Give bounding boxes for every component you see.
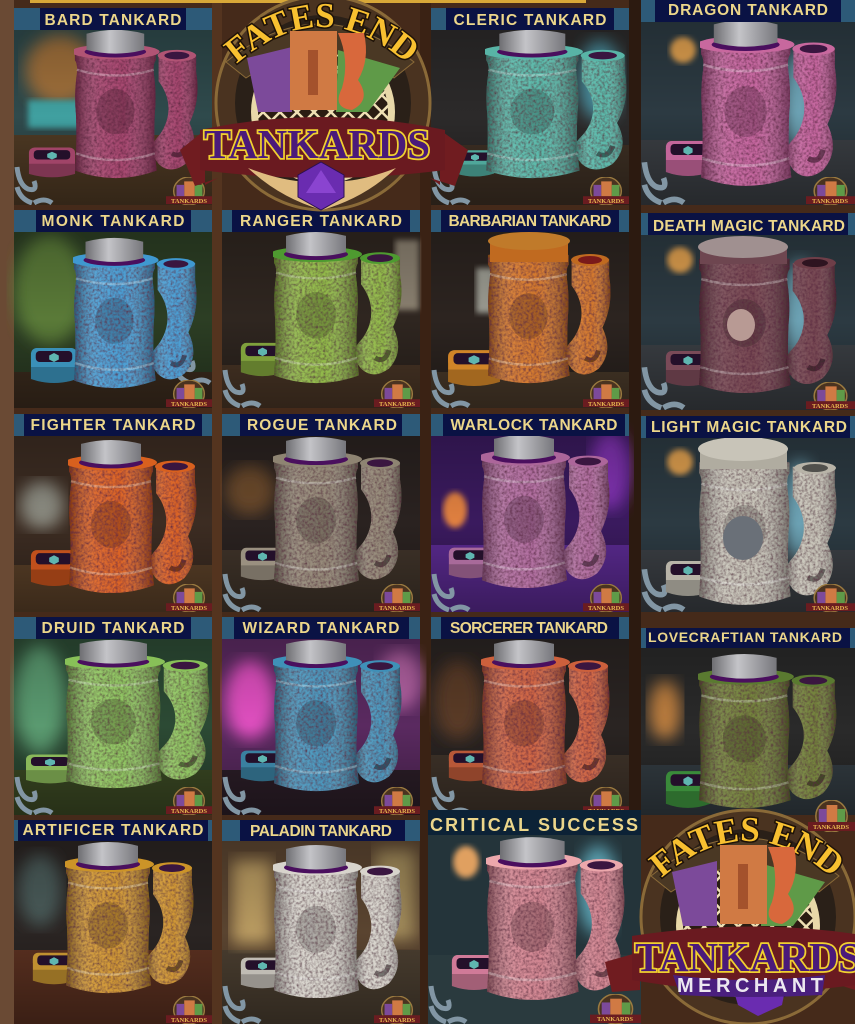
merchant fates end arc: FATES END bbox=[646, 816, 843, 880]
panel: dragon tankard bbox=[641, 0, 855, 205]
panel: monk tankard: MONK TANKARD bbox=[42, 213, 184, 230]
logo: fates end tankards merchant bbox=[605, 808, 855, 1024]
panel: light magic tankard: LIGHT MAGIC TANKARD bbox=[651, 419, 847, 436]
panel: cleric tankard: CLERIC TANKARD bbox=[454, 12, 606, 29]
panel: barbarian tankard: BARBARIAN TANKARD bbox=[448, 213, 612, 230]
panel: druid tankard bbox=[14, 617, 212, 815]
panel: paladin tankard: TANKARDS bbox=[379, 1017, 415, 1024]
panel: rogue tankard: TANKARDS bbox=[379, 605, 415, 612]
panel: warlock tankard: TANKARDS bbox=[588, 605, 624, 612]
panel: wizard tankard: WIZARD TANKARD bbox=[242, 620, 400, 637]
merchant tankard trio bbox=[672, 845, 825, 926]
panel: sorcerer tankard: SORCERER TANKARD bbox=[450, 620, 608, 637]
panel: death magic tankard bbox=[641, 213, 855, 410]
panel: ranger tankard: RANGER TANKARD bbox=[240, 213, 402, 230]
panel: fighter tankard: TANKARDS bbox=[171, 605, 207, 612]
panel: wizard tankard bbox=[222, 617, 422, 815]
panel: bard tankard bbox=[14, 8, 212, 205]
panel: paladin tankard bbox=[222, 820, 420, 1024]
tankard trio bbox=[247, 31, 400, 112]
panel: bard tankard: BARD TANKARD bbox=[44, 12, 182, 29]
panel: warlock tankard: WARLOCK TANKARD bbox=[450, 417, 618, 434]
ornament and d20 bbox=[248, 162, 396, 210]
panel: wizard tankard: TANKARDS bbox=[379, 808, 415, 815]
panel: critical success: CRITICAL SUCCESS bbox=[430, 815, 638, 835]
panel: ranger tankard bbox=[222, 210, 420, 408]
panel: light magic tankard: TANKARDS bbox=[812, 605, 848, 612]
panel: druid tankard: TANKARDS bbox=[171, 808, 207, 815]
panel: death magic tankard: TANKARDS bbox=[812, 403, 848, 410]
panel: lovecraftian tankard bbox=[641, 628, 855, 815]
panel: monk tankard bbox=[14, 210, 212, 408]
panel: artificer tankard bbox=[14, 820, 212, 1024]
panel: lovecraftian tankard: LOVECRAFTIAN TANKARD bbox=[648, 629, 842, 645]
panel: warlock tankard bbox=[431, 414, 630, 612]
panel: critical success: TANKARDS bbox=[597, 1016, 633, 1023]
panel: artificer tankard: TANKARDS bbox=[171, 1017, 207, 1024]
panel: dragon tankard: DRAGON TANKARD bbox=[668, 2, 828, 19]
panel: barbarian tankard: TANKARDS bbox=[588, 401, 624, 408]
merchant label: MERCHANT bbox=[677, 975, 823, 997]
panel: sorcerer tankard: TANKARDS bbox=[588, 808, 624, 815]
panel: ranger tankard: TANKARDS bbox=[379, 401, 415, 408]
panel: monk tankard: TANKARDS bbox=[171, 401, 207, 408]
panel: fighter tankard: FIGHTER TANKARD bbox=[30, 417, 196, 434]
tankards banner: TANKARDS bbox=[204, 121, 430, 167]
mini logo: lovecraftian panel bbox=[808, 800, 855, 832]
panel: cleric tankard: TANKARDS bbox=[588, 198, 624, 205]
tankards banner bbox=[180, 117, 468, 186]
panel: bard tankard: TANKARDS bbox=[171, 198, 207, 205]
panel: artificer tankard: ARTIFICER TANKARD bbox=[22, 822, 204, 839]
panel: cleric tankard bbox=[431, 8, 629, 205]
merchant tankards banner bbox=[605, 926, 855, 992]
mini logo: lovecraftian panel: TANKARDS bbox=[813, 824, 849, 831]
panel: rogue tankard: ROGUE TANKARD bbox=[247, 417, 397, 434]
panel: sorcerer tankard bbox=[431, 617, 629, 815]
panel: barbarian tankard bbox=[431, 210, 629, 408]
logo: fates end tankards bbox=[180, 0, 468, 212]
panel: paladin tankard: PALADIN TANKARD bbox=[250, 823, 392, 840]
panel: druid tankard: DRUID TANKARD bbox=[42, 620, 184, 637]
panel: fighter tankard bbox=[14, 414, 212, 612]
panel: light magic tankard bbox=[641, 416, 855, 612]
panel: dragon tankard: TANKARDS bbox=[812, 198, 848, 205]
panel: death magic tankard: DEATH MAGIC TANKARD bbox=[653, 218, 845, 235]
merchant d20 bbox=[732, 985, 786, 1016]
panel: rogue tankard bbox=[222, 414, 420, 612]
panel: critical success bbox=[428, 810, 641, 1024]
